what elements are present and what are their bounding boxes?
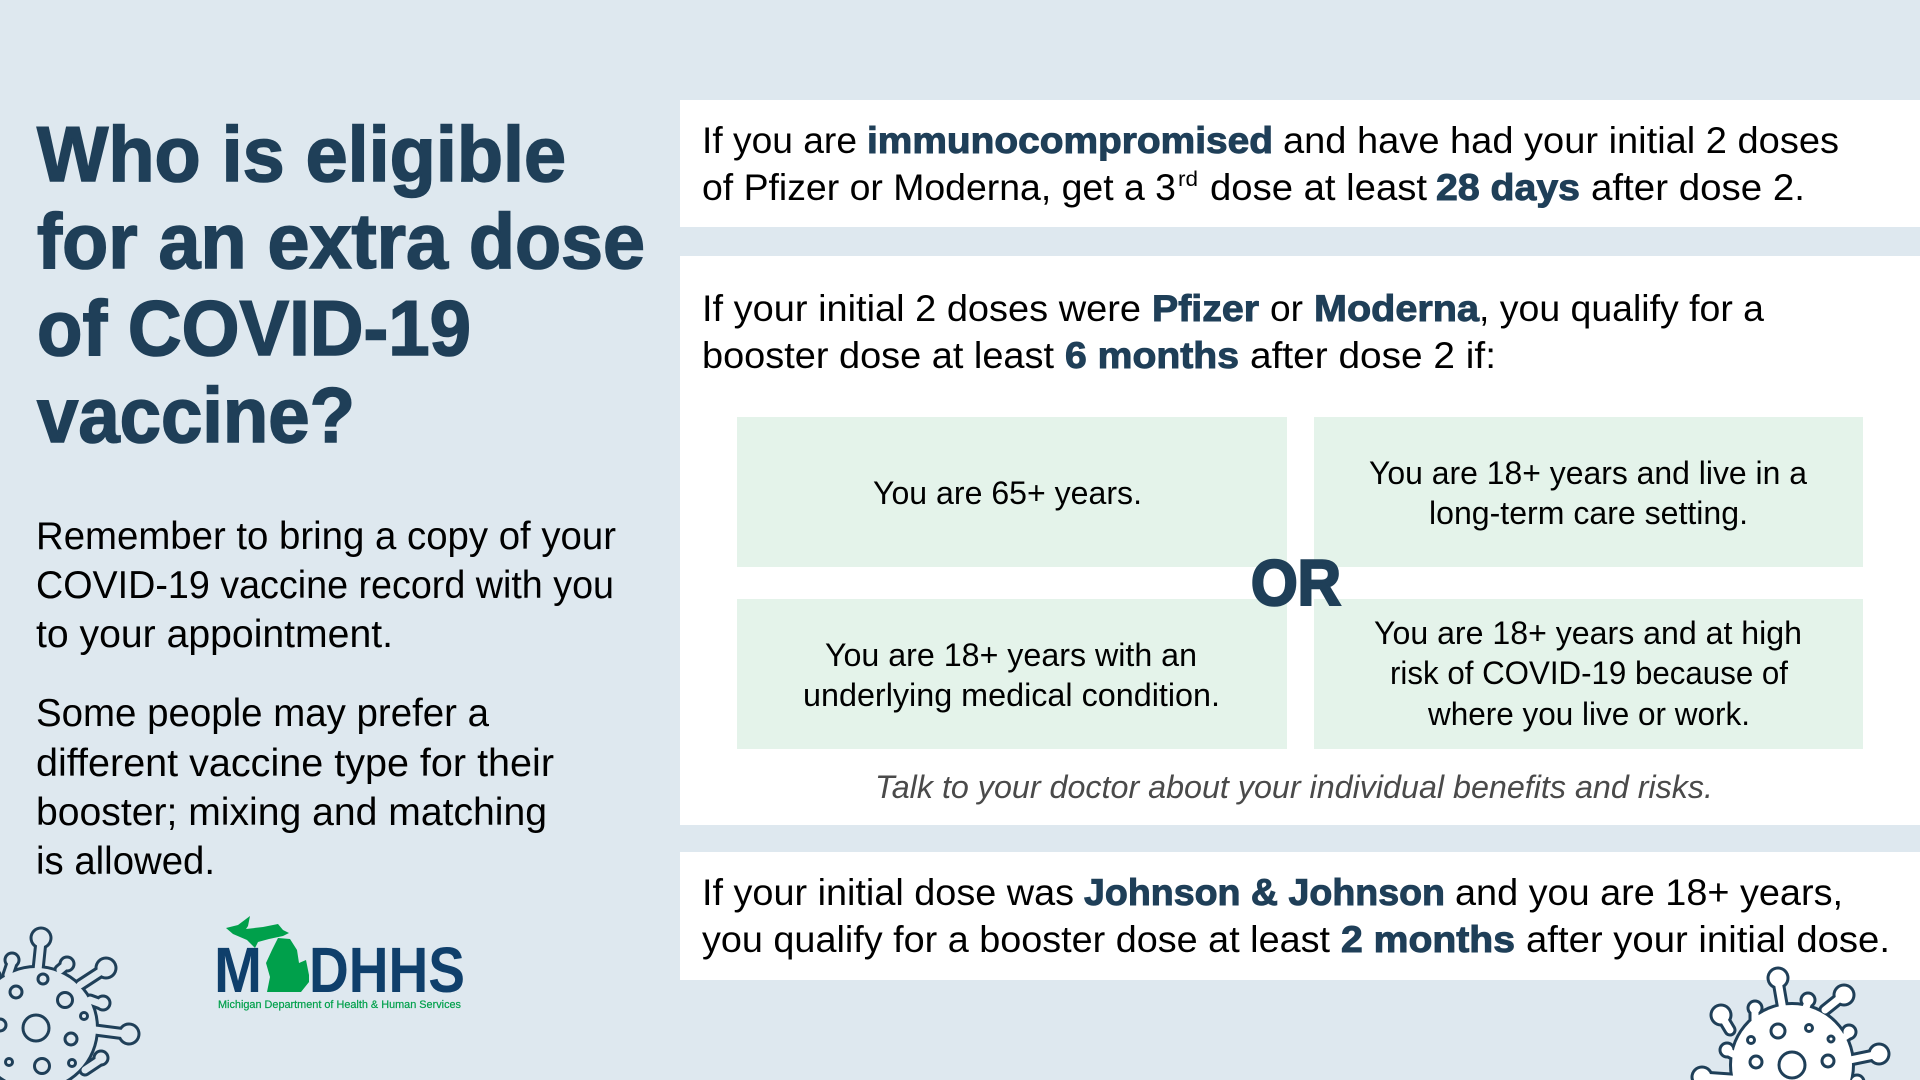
intro text [702, 287, 1764, 376]
intro text: If your initial 2 doses were [702, 287, 1141, 329]
title: Who is eligible [37, 110, 566, 198]
condition box: underlying condition: You are 18+ years with an [825, 637, 1197, 673]
panel: immunocompromised: If you are [702, 119, 857, 161]
OR label: OR [1251, 547, 1341, 619]
note: talk to your doctor: Talk to your doctor about your individual benefits and risks. [875, 769, 1713, 805]
text block: bring vaccine record: COVID-19 vaccine record with you [36, 564, 614, 607]
panel: immunocompromised: dose at least [1210, 166, 1428, 208]
intro text: Pfizer [1152, 287, 1259, 329]
logo letter M: M [214, 934, 262, 1006]
condition box: 65+ [737, 417, 1287, 567]
title [37, 110, 645, 459]
panel: Johnson & Johnson: 2 months [1341, 918, 1515, 960]
title: vaccine? [37, 371, 355, 459]
intro text: , you qualify for a [1479, 287, 1764, 329]
condition box: high risk: risk of COVID-19 because of [1390, 655, 1789, 691]
text block: mixing and matching: Some people may prefer a [36, 692, 490, 735]
panel: Johnson & Johnson: and you are 18+ years, [1455, 871, 1843, 913]
logo Michigan map [226, 916, 309, 992]
panel: immunocompromised: of Pfizer or Moderna, get a 3 [702, 166, 1176, 208]
text block: mixing and matching [36, 692, 554, 883]
panel: Johnson & Johnson: Johnson & Johnson [1084, 871, 1445, 913]
panel: Johnson & Johnson: after your initial dose. [1526, 918, 1890, 960]
condition box: high risk [1314, 599, 1863, 749]
panel: Pfizer or Moderna booster [680, 256, 1920, 825]
condition box: 65+: You are 65+ years. [873, 475, 1142, 511]
text block: bring vaccine record: to your appointment. [36, 613, 393, 656]
condition box: high risk: You are 18+ years and at high [1374, 615, 1802, 651]
logo caption: Michigan Department of Health & Human Services [218, 999, 461, 1011]
condition box: long-term care: long-term care setting. [1429, 495, 1748, 531]
condition box: underlying condition [737, 599, 1287, 749]
condition box: long-term care: You are 18+ years and live in a [1369, 455, 1808, 491]
icon: virus left [0, 926, 140, 1080]
text block: bring vaccine record [36, 515, 616, 656]
condition box: long-term care [1314, 417, 1863, 567]
intro text: or [1270, 287, 1303, 329]
panel: immunocompromised: rd [1178, 168, 1198, 191]
text block: bring vaccine record: Remember to bring a copy of your [36, 515, 616, 558]
condition box: high risk: where you live or work. [1427, 696, 1750, 732]
text block: mixing and matching: different vaccine type for their [36, 742, 554, 785]
panel: Johnson & Johnson [680, 852, 1920, 980]
icon: virus right [1690, 966, 1890, 1080]
intro text: after dose 2 if: [1250, 334, 1496, 376]
panel: Johnson & Johnson: you qualify for a booster dose at least [702, 918, 1331, 960]
intro text: 6 months [1065, 334, 1239, 376]
intro text: Moderna [1314, 287, 1480, 329]
panel: immunocompromised: immunocompromised [867, 119, 1273, 161]
intro text: booster dose at least [702, 334, 1055, 376]
icon: MDHHS logo [214, 916, 465, 1011]
panel: immunocompromised: 28 days [1436, 166, 1580, 208]
panel: Johnson & Johnson: If your initial dose was [702, 871, 1074, 913]
title: of COVID-19 [37, 284, 471, 372]
logo letters DHHS: DHHS [309, 934, 465, 1006]
condition box: underlying condition: underlying medical condition. [803, 677, 1220, 713]
panel: immunocompromised: and have had your initial 2 doses [1283, 119, 1839, 161]
text block: mixing and matching: booster; mixing and matching [36, 791, 547, 834]
title: for an extra dose [37, 197, 645, 285]
panel: immunocompromised: after dose 2. [1591, 166, 1805, 208]
text block: mixing and matching: is allowed. [36, 840, 215, 883]
panel: immunocompromised [680, 100, 1920, 227]
